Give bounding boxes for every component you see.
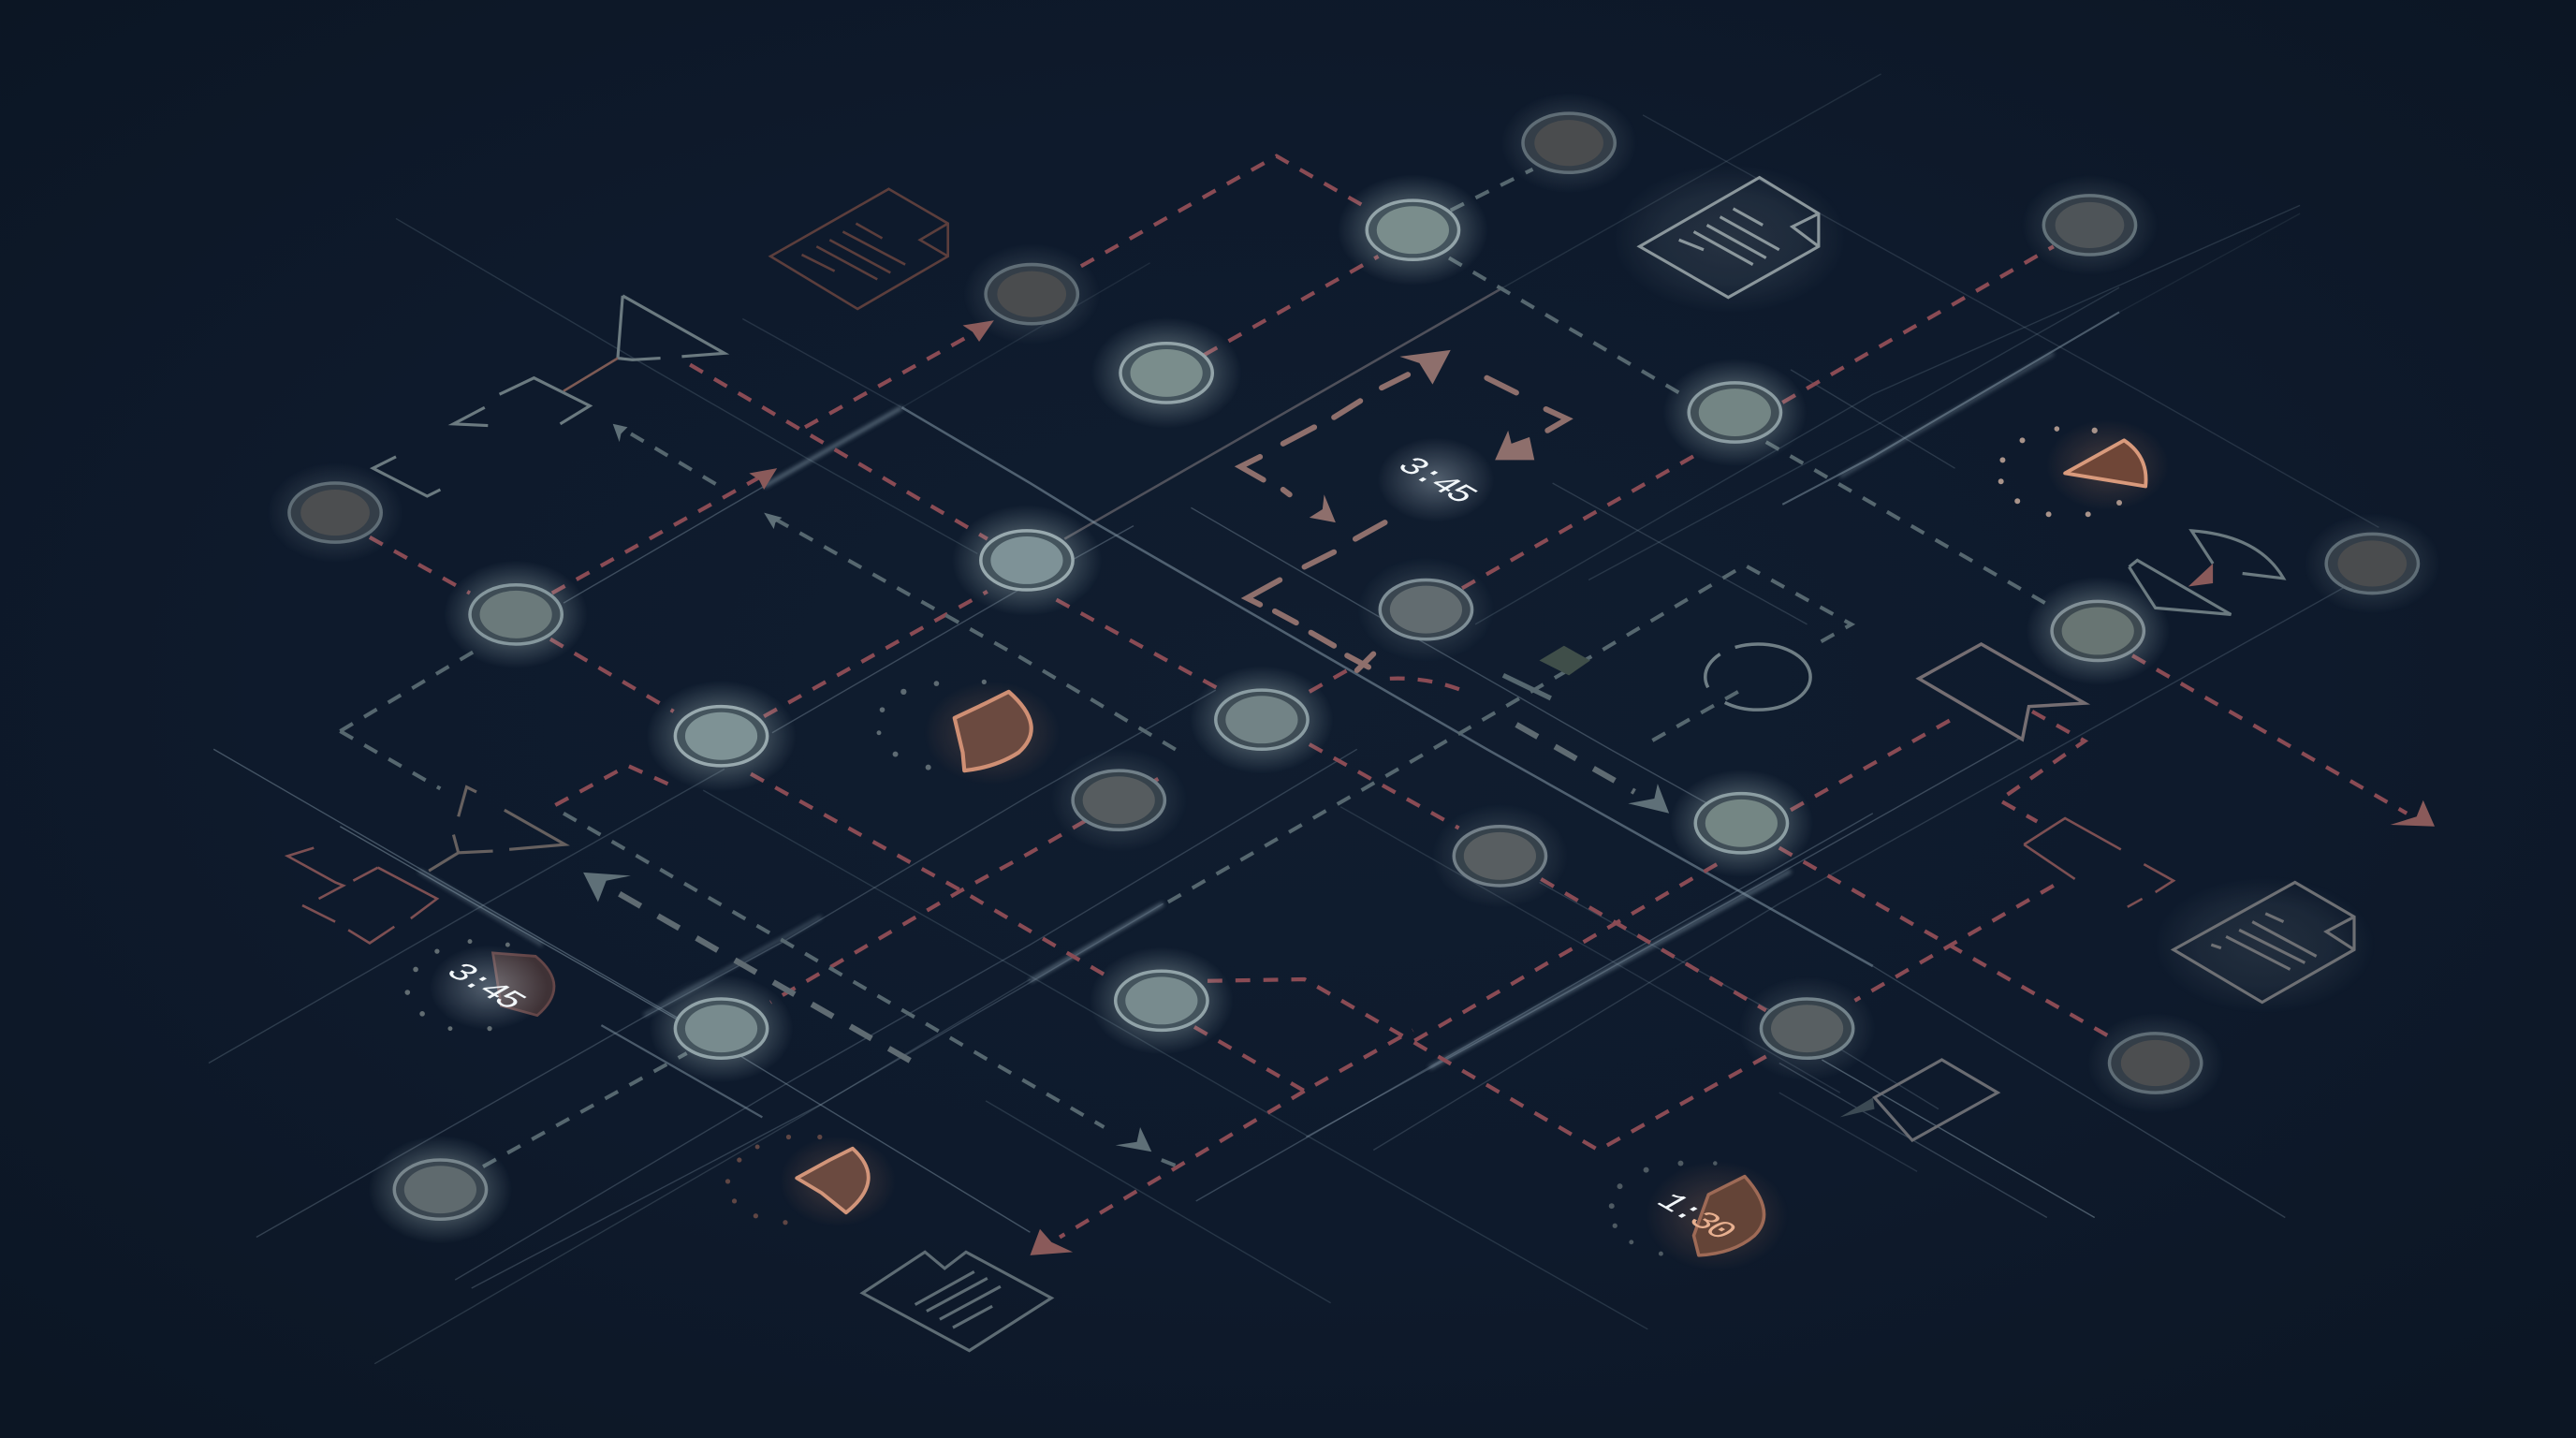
node dim 1 bbox=[1500, 92, 1638, 194]
clock: orange sector top right bbox=[1998, 419, 2170, 517]
node medium 6 bbox=[1431, 803, 1569, 909]
time readout 3:45: 3:45 bbox=[1385, 452, 1484, 508]
node bright 8 bbox=[1669, 769, 1814, 877]
red dashed connectors bbox=[370, 156, 2407, 1238]
nodes bbox=[266, 92, 2441, 1244]
node bright 3 bbox=[1662, 359, 1808, 466]
clock: 3:45 centre bbox=[1377, 437, 1495, 522]
node dim 2 bbox=[2021, 174, 2159, 276]
node bright 10 bbox=[649, 975, 794, 1083]
clock dots bbox=[725, 1135, 822, 1225]
thin blueprint lines bbox=[209, 74, 2378, 1364]
red arrowheads bbox=[749, 320, 2435, 1255]
node bright 7 bbox=[2026, 577, 2170, 685]
clock dots bbox=[877, 680, 987, 770]
node dim 4 bbox=[266, 462, 404, 564]
icon: document bottom bbox=[862, 1252, 1051, 1351]
clock: orange sector bottom left bbox=[725, 1135, 897, 1227]
time readout 3:45: 3:45 bbox=[434, 959, 533, 1015]
grey arrowheads bbox=[583, 424, 1669, 1152]
clock dots bbox=[1998, 426, 2122, 517]
node medium 5 bbox=[1050, 748, 1188, 853]
icon: flag lower-left bbox=[429, 787, 565, 871]
node medium 3 bbox=[368, 1136, 513, 1244]
icon: document faded red bbox=[770, 189, 948, 309]
node dim 5 bbox=[2304, 513, 2441, 614]
node bright 5 bbox=[646, 681, 797, 792]
clock: 3:45 lower left bbox=[404, 939, 554, 1031]
icon: document bright bbox=[1612, 163, 1848, 314]
time readout 1:30: 1:30 bbox=[1646, 1189, 1743, 1245]
node bright 6 bbox=[1190, 666, 1334, 774]
grey dashed connectors bbox=[340, 169, 2054, 1167]
node bright 2 bbox=[1090, 317, 1242, 429]
clock: 1:30 bottom centre bbox=[1609, 1160, 1789, 1271]
clock dots bbox=[404, 939, 510, 1031]
clock: orange sector centre left bbox=[877, 680, 1061, 785]
bright line highlights bbox=[419, 353, 2054, 1068]
icon: red outline boxes lower-left bbox=[287, 848, 437, 943]
node medium 2 bbox=[1357, 557, 1495, 662]
node bright 4 bbox=[951, 505, 1103, 616]
node bright 9 bbox=[1090, 946, 1234, 1055]
icon: bookmark bbox=[1919, 644, 2085, 740]
icon: dashed circle bbox=[1705, 644, 1810, 710]
icon: flag top-left bbox=[373, 296, 724, 496]
node bright 1 bbox=[1338, 174, 1488, 286]
icon: diamond outline bottom right bbox=[1840, 1060, 1998, 1140]
icon: red outline boxes right bbox=[2024, 818, 2174, 907]
icon: small chip bbox=[1540, 646, 1590, 675]
central brown dashed loop with arrows bbox=[1240, 350, 1567, 670]
node dim 3 bbox=[963, 243, 1101, 345]
icon: broken pointer shape bbox=[2130, 531, 2284, 614]
icon: document right bbox=[2152, 875, 2376, 1014]
clock dots bbox=[1609, 1161, 1718, 1256]
node dim 6 bbox=[2086, 1012, 2224, 1114]
node medium 4 bbox=[1738, 976, 1876, 1081]
node medium 1 bbox=[444, 560, 588, 668]
